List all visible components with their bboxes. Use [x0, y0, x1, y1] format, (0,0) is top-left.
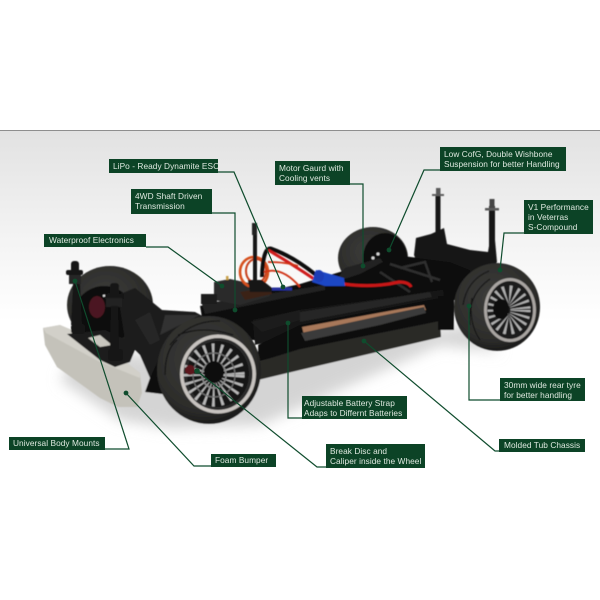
wires: [240, 249, 411, 289]
label: battery strap: Adaps to Differnt Batteries: [304, 408, 402, 418]
label: tyre compound: in Veterras: [528, 212, 568, 222]
label: tyre compound: V1 Performance: [528, 202, 589, 212]
label: tyre compound: S-Compound: [528, 222, 578, 232]
upper chassis plate and braces: [200, 255, 470, 345]
label: motor guard: Cooling vents: [279, 173, 330, 183]
label: waterproof electronics: [44, 234, 146, 247]
rear right wheel: [454, 263, 540, 351]
front body mount plate: [67, 330, 137, 367]
leader: rear tyre: [467, 304, 500, 400]
label: rear tyre: for better handling: [504, 390, 572, 400]
label: LiPo ESC: LiPo - Ready Dynamite ESC: [113, 161, 219, 171]
label: tyre compound: [524, 200, 593, 234]
label: body mounts: [9, 437, 105, 450]
rear left wheel: [338, 227, 408, 289]
leader: brake disc: [195, 369, 326, 467]
leader: suspension: [387, 170, 440, 252]
label: motor guard: Motor Gaurd with: [279, 163, 344, 173]
label: suspension: Suspension for better Handling: [444, 159, 560, 169]
foam bumper: [43, 325, 142, 407]
leader: foam bumper: [124, 391, 211, 466]
leader: 4WD transmission: [212, 213, 237, 312]
label: waterproof electronics: Waterproof Electronics: [49, 235, 134, 245]
leader: waterproof electronics: [146, 247, 224, 288]
leader: motor guard: [350, 184, 365, 268]
label: tub chassis: [499, 439, 585, 452]
leader: LiPo ESC: [218, 172, 285, 289]
front right wheel: [157, 316, 261, 424]
front left wheel: [67, 266, 153, 344]
label: suspension: Low CofG, Double Wishbone: [444, 149, 552, 159]
label: brake disc: Break Disc and: [330, 446, 387, 456]
leader lines: [73, 170, 524, 467]
label: 4WD transmission: Transmission: [135, 201, 185, 211]
label: brake disc: Caliper inside the Wheel: [330, 456, 421, 466]
label: brake disc: [326, 444, 425, 468]
battery tub: [251, 290, 454, 380]
ground shadow: [60, 325, 500, 428]
label: motor guard: [275, 161, 350, 185]
front posts: [66, 261, 124, 361]
label: tub chassis: Molded Tub Chassis: [504, 440, 580, 450]
background gradient panel: [0, 131, 600, 321]
label: foam bumper: Foam Bumper: [215, 455, 268, 465]
label: foam bumper: [211, 454, 276, 467]
label: 4WD transmission: [131, 189, 212, 214]
ESC and electronics: [201, 276, 272, 305]
leader: body mounts: [73, 279, 129, 449]
label: battery strap: Adjustable Battery Strap: [304, 398, 395, 408]
leader: tub chassis: [362, 339, 499, 451]
rear suspension and posts: [414, 188, 499, 297]
label: 4WD transmission: 4WD Shaft Driven: [135, 191, 202, 201]
blue connector: [312, 270, 345, 286]
label: rear tyre: [500, 378, 585, 401]
car: [43, 188, 540, 428]
label: body mounts: Universal Body Mounts: [13, 438, 100, 448]
label: battery strap: [302, 396, 407, 419]
antenna: [248, 223, 272, 292]
leader: battery strap: [286, 321, 302, 418]
label: suspension: [440, 147, 566, 171]
front suspension arm: [118, 288, 210, 395]
leader: tyre compound: [498, 233, 524, 272]
label: LiPo ESC: [109, 159, 218, 173]
label: rear tyre: 30mm wide rear tyre: [504, 380, 581, 390]
